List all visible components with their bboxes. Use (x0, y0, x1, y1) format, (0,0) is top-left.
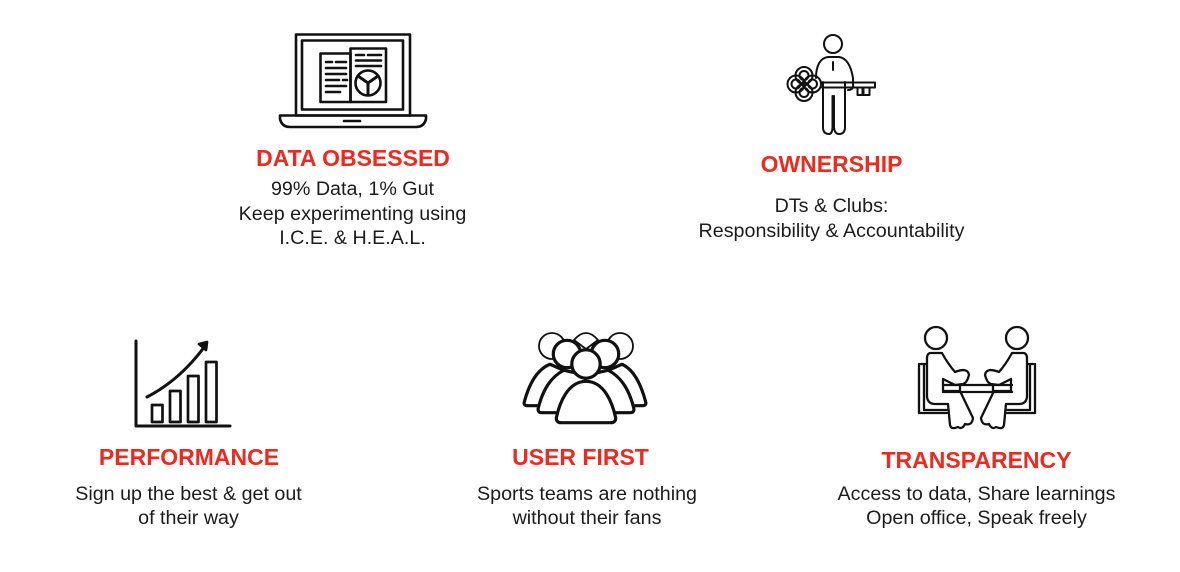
text: user first: without their fans (513, 507, 661, 529)
text: data obsessed (239, 178, 466, 249)
icon: two people at a table (919, 327, 1035, 428)
text: performance: of their way (138, 507, 239, 529)
icon: person holding key (788, 35, 875, 134)
icon: rising bar chart (136, 341, 230, 426)
text: ownership (699, 195, 964, 242)
heading: user first: USER FIRST (512, 444, 649, 470)
text: performance (75, 482, 302, 529)
text: data obsessed: I.C.E. & H.E.A.L. (279, 227, 426, 249)
text: ownership: Responsibility & Accountability (699, 220, 964, 242)
text: transparency: Open office, Speak freely (866, 507, 1087, 529)
icon: laptop with documents (280, 34, 426, 127)
text: data obsessed: 99% Data, 1% Gut (271, 178, 434, 200)
text: ownership: DTs & Clubs: (775, 195, 888, 217)
text: user first (477, 482, 697, 529)
text: transparency (838, 482, 1115, 529)
text: data obsessed: Keep experimenting using (239, 203, 466, 225)
text: transparency: Access to data, Share learnings (838, 482, 1115, 504)
heading: transparency: TRANSPARENCY (882, 447, 1071, 473)
text: user first: Sports teams are nothing (477, 482, 697, 504)
heading: performance: PERFORMANCE (99, 444, 279, 470)
heading: data obsessed: DATA OBSESSED (256, 145, 450, 171)
icon: group of users (525, 333, 645, 422)
heading: ownership: OWNERSHIP (761, 151, 902, 177)
text: performance: Sign up the best & get out (75, 482, 302, 504)
